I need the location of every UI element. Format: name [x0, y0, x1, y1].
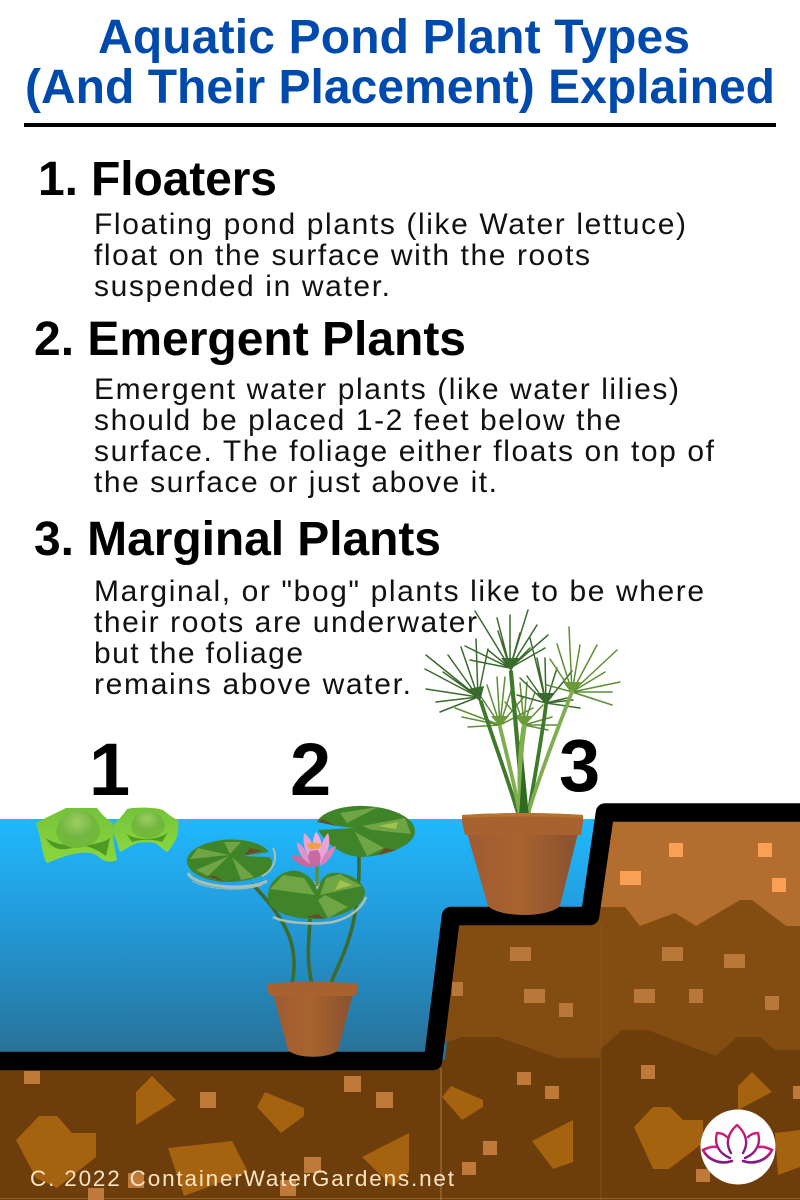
papyrus stems — [481, 672, 572, 817]
lily stems — [253, 857, 359, 985]
papyrus pot — [462, 813, 583, 915]
lily pad centre — [268, 871, 366, 923]
text block: floaters: float on the surface with the roots — [94, 239, 590, 272]
footer credit: C. 2022 ContainerWaterGardens.net — [30, 1166, 455, 1191]
title — [25, 11, 775, 114]
text block: marginal plants: but the foliage — [94, 637, 303, 670]
number 1: 1 — [89, 728, 130, 811]
text block: emergent plants — [94, 373, 715, 499]
lily pad left — [187, 840, 275, 889]
text block: marginal plants — [94, 575, 704, 701]
text block: emergent plants: Emergent water plants (like water lilies) — [94, 373, 679, 406]
icon: water lily in pot — [187, 806, 415, 1057]
text block: marginal plants: their roots are underwater — [94, 606, 477, 639]
heading: emergent plants: 2. Emergent Plants — [34, 313, 466, 366]
soil rocks — [16, 1072, 800, 1196]
text block: emergent plants: should be placed 1-2 feet below the — [94, 404, 621, 437]
icon: water lettuce floaters — [36, 808, 178, 863]
text block: floaters: suspended in water. — [94, 270, 390, 303]
lotus mark — [703, 1125, 772, 1162]
pond cross-section diagram — [0, 812, 800, 1200]
soil squares: middle layer — [452, 947, 779, 1017]
text block: floaters: Floating pond plants (like Water lettuce) — [94, 208, 686, 241]
number 2: 2 — [290, 728, 331, 811]
text block: emergent plants: surface. The foliage either floats on top of — [94, 435, 715, 468]
heading: marginal plants: 3. Marginal Plants — [34, 513, 441, 566]
pond liner — [0, 812, 800, 1061]
soil squares: deep layer — [24, 1065, 800, 1200]
lettuce left — [36, 808, 117, 863]
lettuce right — [113, 808, 178, 852]
title: Aquatic Pond Plant Types — [98, 11, 690, 64]
text block: floaters — [94, 208, 686, 303]
logo: lotus badge — [700, 1110, 776, 1184]
title rule — [24, 123, 776, 127]
soil: deep layer — [0, 1000, 800, 1200]
lily flower — [291, 832, 336, 886]
papyrus heads — [425, 610, 620, 730]
text block: marginal plants: remains above water. — [94, 668, 411, 701]
text block: emergent plants: the surface or just above it. — [94, 466, 497, 499]
heading: floaters: 1. Floaters — [38, 153, 277, 206]
soil squares: top layer — [620, 843, 786, 892]
number 3: 3 — [559, 724, 600, 807]
soil: top layer — [598, 812, 800, 926]
water — [0, 819, 610, 1065]
text block: marginal plants: Marginal, or "bog" plants like to be where — [94, 575, 704, 608]
title: (And Their Placement) Explained — [25, 61, 775, 114]
lily pad right — [317, 806, 415, 857]
lily pot — [268, 982, 358, 1057]
icon: papyrus in pot — [425, 610, 620, 915]
soil: middle layer — [445, 880, 800, 1058]
